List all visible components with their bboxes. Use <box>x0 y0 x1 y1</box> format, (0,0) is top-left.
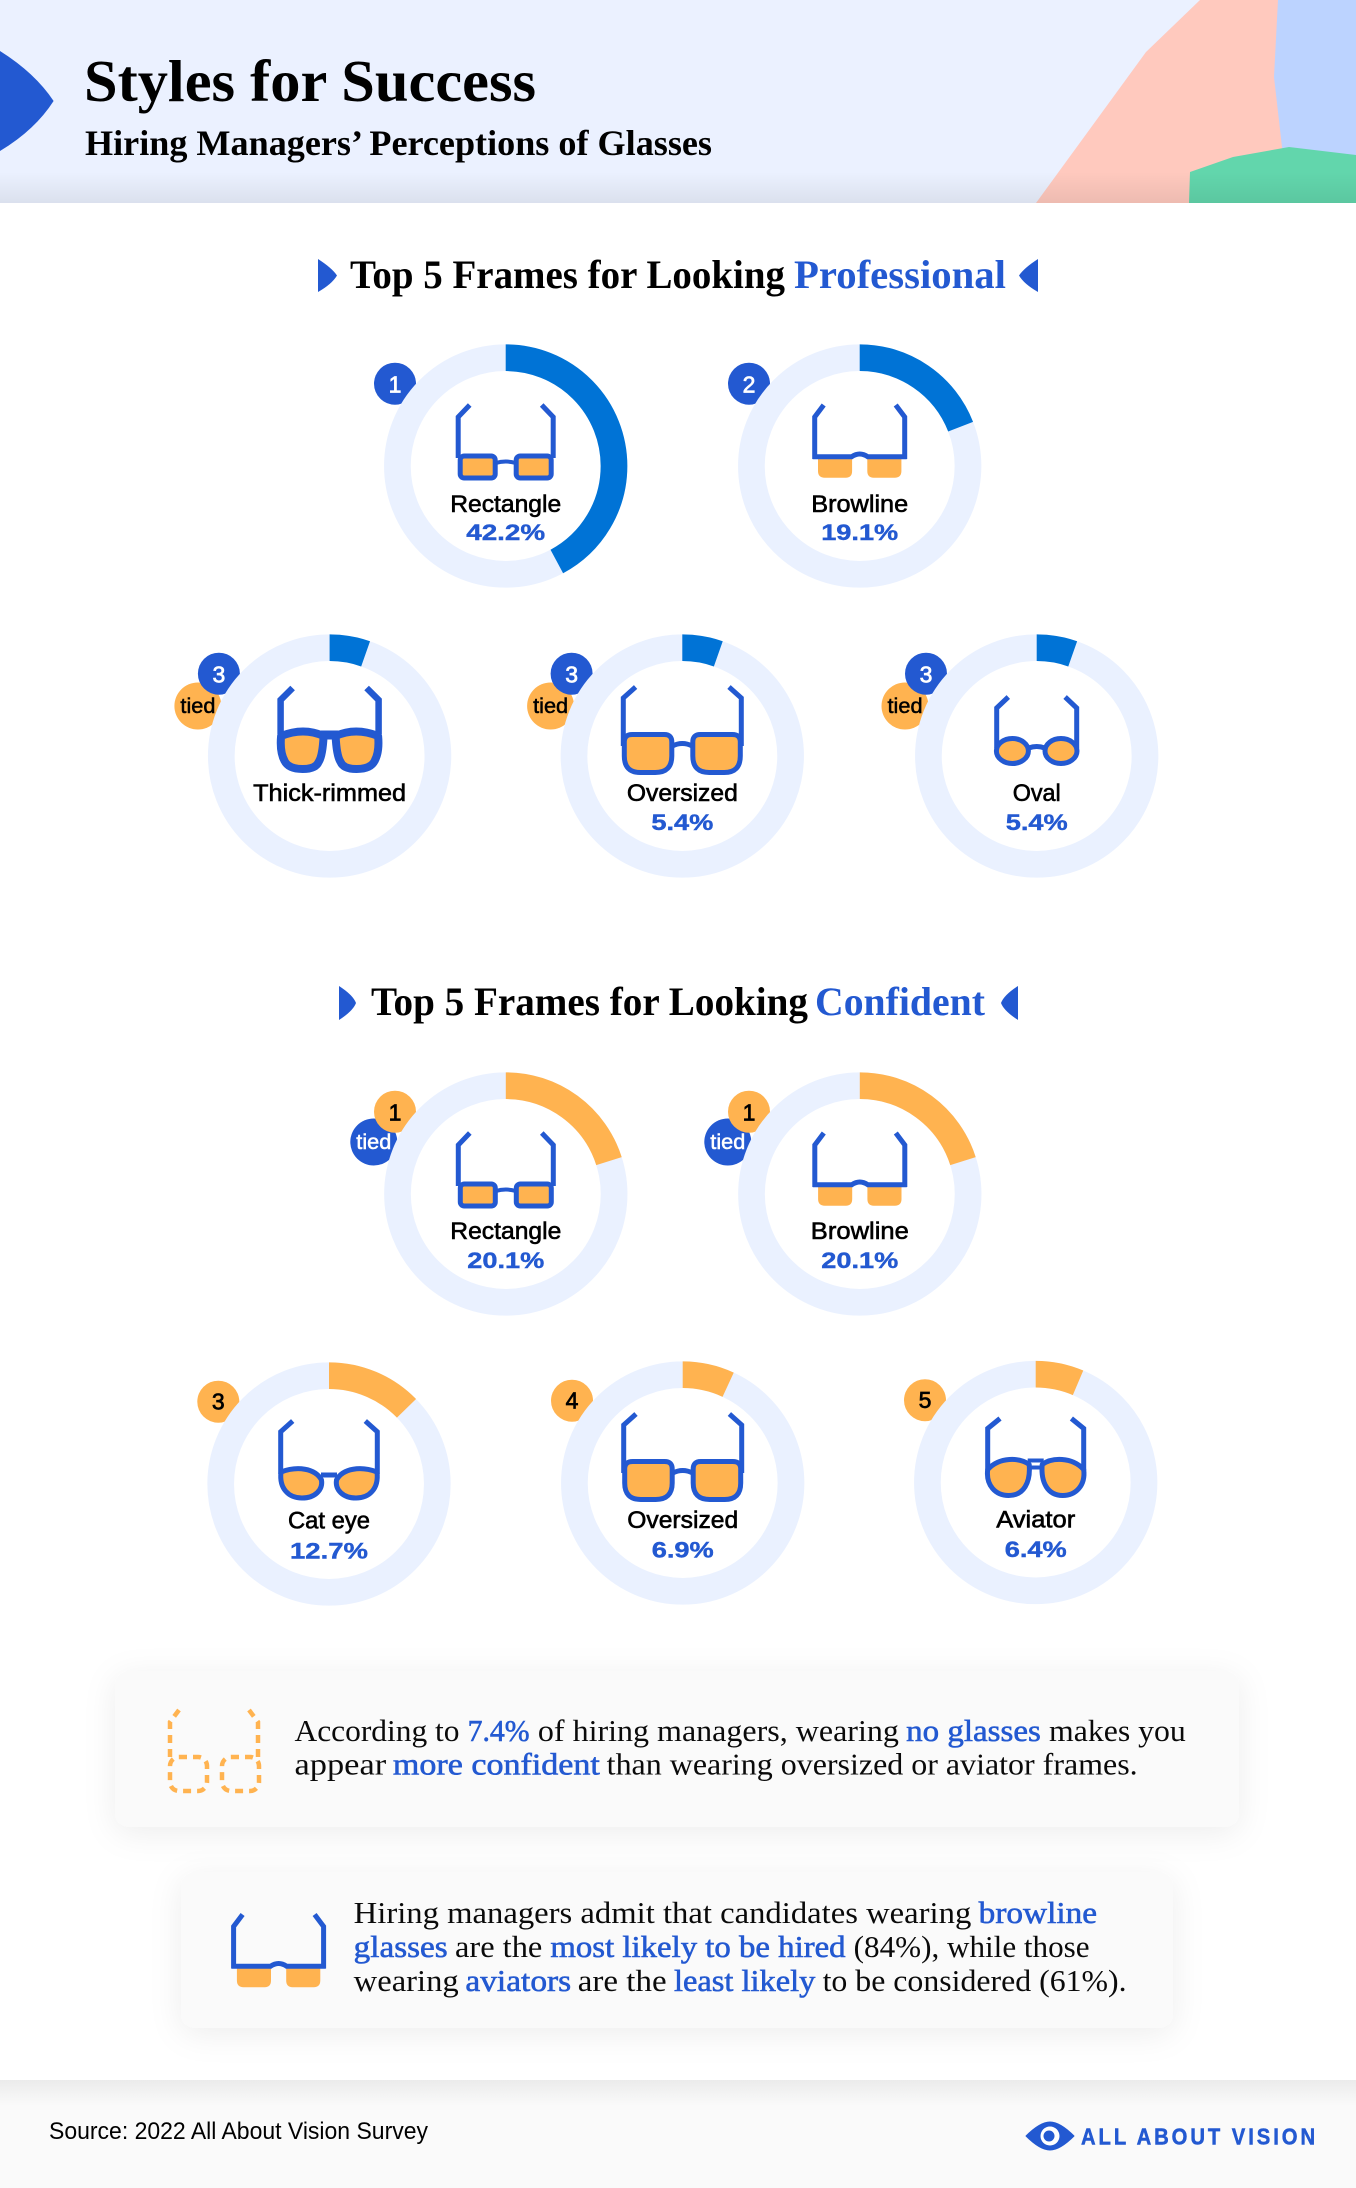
text block: appear <box>294 1746 387 1782</box>
text block: than wearing oversized or aviator frames. <box>607 1746 1138 1782</box>
card: Oversized 5.4% <box>527 648 791 864</box>
donut ring <box>221 1376 437 1592</box>
decorative shape: green <box>1189 147 1356 203</box>
badge: rank 1: 1 <box>389 372 401 398</box>
badge: rank 4 <box>551 1380 593 1422</box>
value: 5.4% <box>651 810 713 835</box>
value: 19.1% <box>821 520 898 545</box>
badge: rank 1 tied: 1 <box>389 1100 401 1126</box>
value: 5.4% <box>1006 810 1068 835</box>
icon: thick-rimmed glasses <box>281 688 379 769</box>
card: Oval 5.4% <box>881 648 1145 864</box>
title: Styles for Success <box>84 48 536 114</box>
value: 6.9% <box>652 1538 714 1562</box>
text block: most likely to be hired <box>550 1929 846 1964</box>
donut ring <box>397 358 614 574</box>
label: Browline <box>811 491 908 518</box>
footer <box>0 2080 1356 2188</box>
text block: are the <box>455 1929 542 1964</box>
label: Rectangle <box>450 1218 561 1245</box>
badge: rank 3 tied <box>527 653 593 730</box>
label: Oversized <box>627 780 738 807</box>
subtitle: Hiring Managers’ Perceptions of Glasses <box>85 123 712 163</box>
donut ring <box>398 1086 614 1302</box>
icon: oversized glasses <box>623 687 741 772</box>
badge: rank 3 <box>197 1381 239 1423</box>
badge: rank 3 tied <box>174 653 240 730</box>
value: 6.4% <box>1005 1537 1067 1562</box>
panel: browline callout <box>181 1872 1173 2028</box>
card: Browline 20.1% <box>704 1086 968 1302</box>
badge: rank 3: 3 <box>212 1389 225 1415</box>
label: Aviator <box>996 1506 1075 1534</box>
icon: dashed no glasses <box>170 1710 259 1791</box>
value: 20.1% <box>467 1248 544 1273</box>
text block: wearing <box>354 1963 459 1998</box>
icon: rectangle glasses <box>458 405 553 478</box>
text block: more confident <box>393 1746 600 1782</box>
icon: oversized glasses <box>624 1414 742 1500</box>
badge: rank 3 tied: 3 <box>213 662 225 688</box>
logo: All About Vision: ALL ABOUT VISION <box>1081 2123 1315 2150</box>
badge: rank 2: 2 <box>743 372 755 398</box>
heading: confident <box>339 979 1018 1024</box>
badge: rank 3 tied: tied <box>887 695 922 718</box>
label: Browline <box>811 1218 909 1245</box>
heading: professional: Professional <box>794 252 1006 297</box>
text block <box>354 1895 1127 1998</box>
text block: glasses <box>354 1929 448 1964</box>
label: Thick-rimmed <box>253 780 406 807</box>
badge: rank 1 tied <box>704 1091 770 1166</box>
text block: least likely <box>674 1963 816 1998</box>
text block: aviators <box>465 1963 571 1998</box>
text block: browline <box>979 1895 1097 1930</box>
text block: (84%), while those <box>854 1929 1090 1964</box>
badge: rank 1 tied: tied <box>356 1131 391 1154</box>
card: Rectangle 42.2% <box>374 358 614 574</box>
card: Browline 19.1% <box>728 358 968 574</box>
header banner <box>0 0 1356 203</box>
donut ring <box>927 1374 1144 1591</box>
badge: rank 2 <box>728 363 770 405</box>
badge: rank 1 <box>374 363 416 405</box>
badge: rank 5: 5 <box>919 1387 931 1413</box>
text block: no glasses <box>906 1713 1041 1748</box>
donut ring <box>574 648 791 864</box>
badge: rank 3 tied: 3 <box>920 662 932 688</box>
donut ring <box>928 648 1145 864</box>
donut ring <box>574 1375 791 1591</box>
value: 42.2% <box>466 520 545 545</box>
text block: makes you <box>1049 1713 1186 1748</box>
icon: aviator glasses <box>987 1418 1084 1496</box>
icon: oval glasses <box>996 697 1077 764</box>
icon: browline glasses <box>232 1914 326 1987</box>
text block: are the <box>578 1963 667 1998</box>
value: 12.7% <box>290 1538 368 1564</box>
icon: blue arrow <box>0 51 54 151</box>
badge: rank 5 <box>904 1379 946 1421</box>
value: 20.1% <box>821 1248 898 1273</box>
badge: rank 1 tied: tied <box>710 1131 745 1154</box>
heading: confident: Top 5 Frames for Looking <box>371 979 808 1024</box>
badge: rank 4: 4 <box>566 1388 579 1414</box>
card: Cat eye 12.7% <box>197 1376 437 1592</box>
card: Aviator 6.4% <box>904 1374 1144 1591</box>
text block: to be considered (61%). <box>823 1963 1127 1998</box>
decorative shape: peach <box>1036 0 1290 203</box>
decorative shape: light blue <box>1265 0 1356 165</box>
card: Rectangle 20.1% <box>350 1086 614 1302</box>
text block: Hiring managers admit that candidates wearing <box>354 1895 971 1930</box>
heading: professional: Top 5 Frames for Looking <box>350 252 785 297</box>
donut ring <box>751 358 968 574</box>
badge: rank 3 tied: 3 <box>565 662 578 688</box>
text block: of hiring managers, wearing <box>538 1713 899 1748</box>
badge: rank 1 tied: 1 <box>743 1100 755 1126</box>
icon: rectangle glasses <box>458 1133 553 1206</box>
label: Cat eye <box>288 1508 370 1534</box>
panel: no glasses callout <box>115 1671 1239 1827</box>
heading: confident: Confident <box>815 979 986 1024</box>
icon: browline glasses <box>813 1133 907 1206</box>
donut ring <box>221 648 438 864</box>
text block: According to <box>294 1713 460 1748</box>
card: Oversized 6.9% <box>551 1375 791 1591</box>
badge: rank 1 tied <box>350 1091 416 1166</box>
badge: rank 3 tied: tied <box>533 695 568 718</box>
label: Oval <box>1013 780 1061 807</box>
card: Thick-rimmed <box>174 648 438 864</box>
heading: professional <box>318 252 1038 297</box>
text block <box>294 1713 1186 1782</box>
text block: 7.4% <box>468 1713 530 1748</box>
badge: rank 3 tied: tied <box>180 695 215 718</box>
donut ring <box>752 1086 968 1302</box>
label: Oversized <box>627 1507 738 1534</box>
icon: browline glasses <box>813 405 907 478</box>
icon: cat eye glasses <box>281 1421 377 1498</box>
source: Source: 2022 All About Vision Survey <box>49 2118 428 2145</box>
badge: rank 3 tied <box>881 653 947 730</box>
label: Rectangle <box>450 491 561 518</box>
